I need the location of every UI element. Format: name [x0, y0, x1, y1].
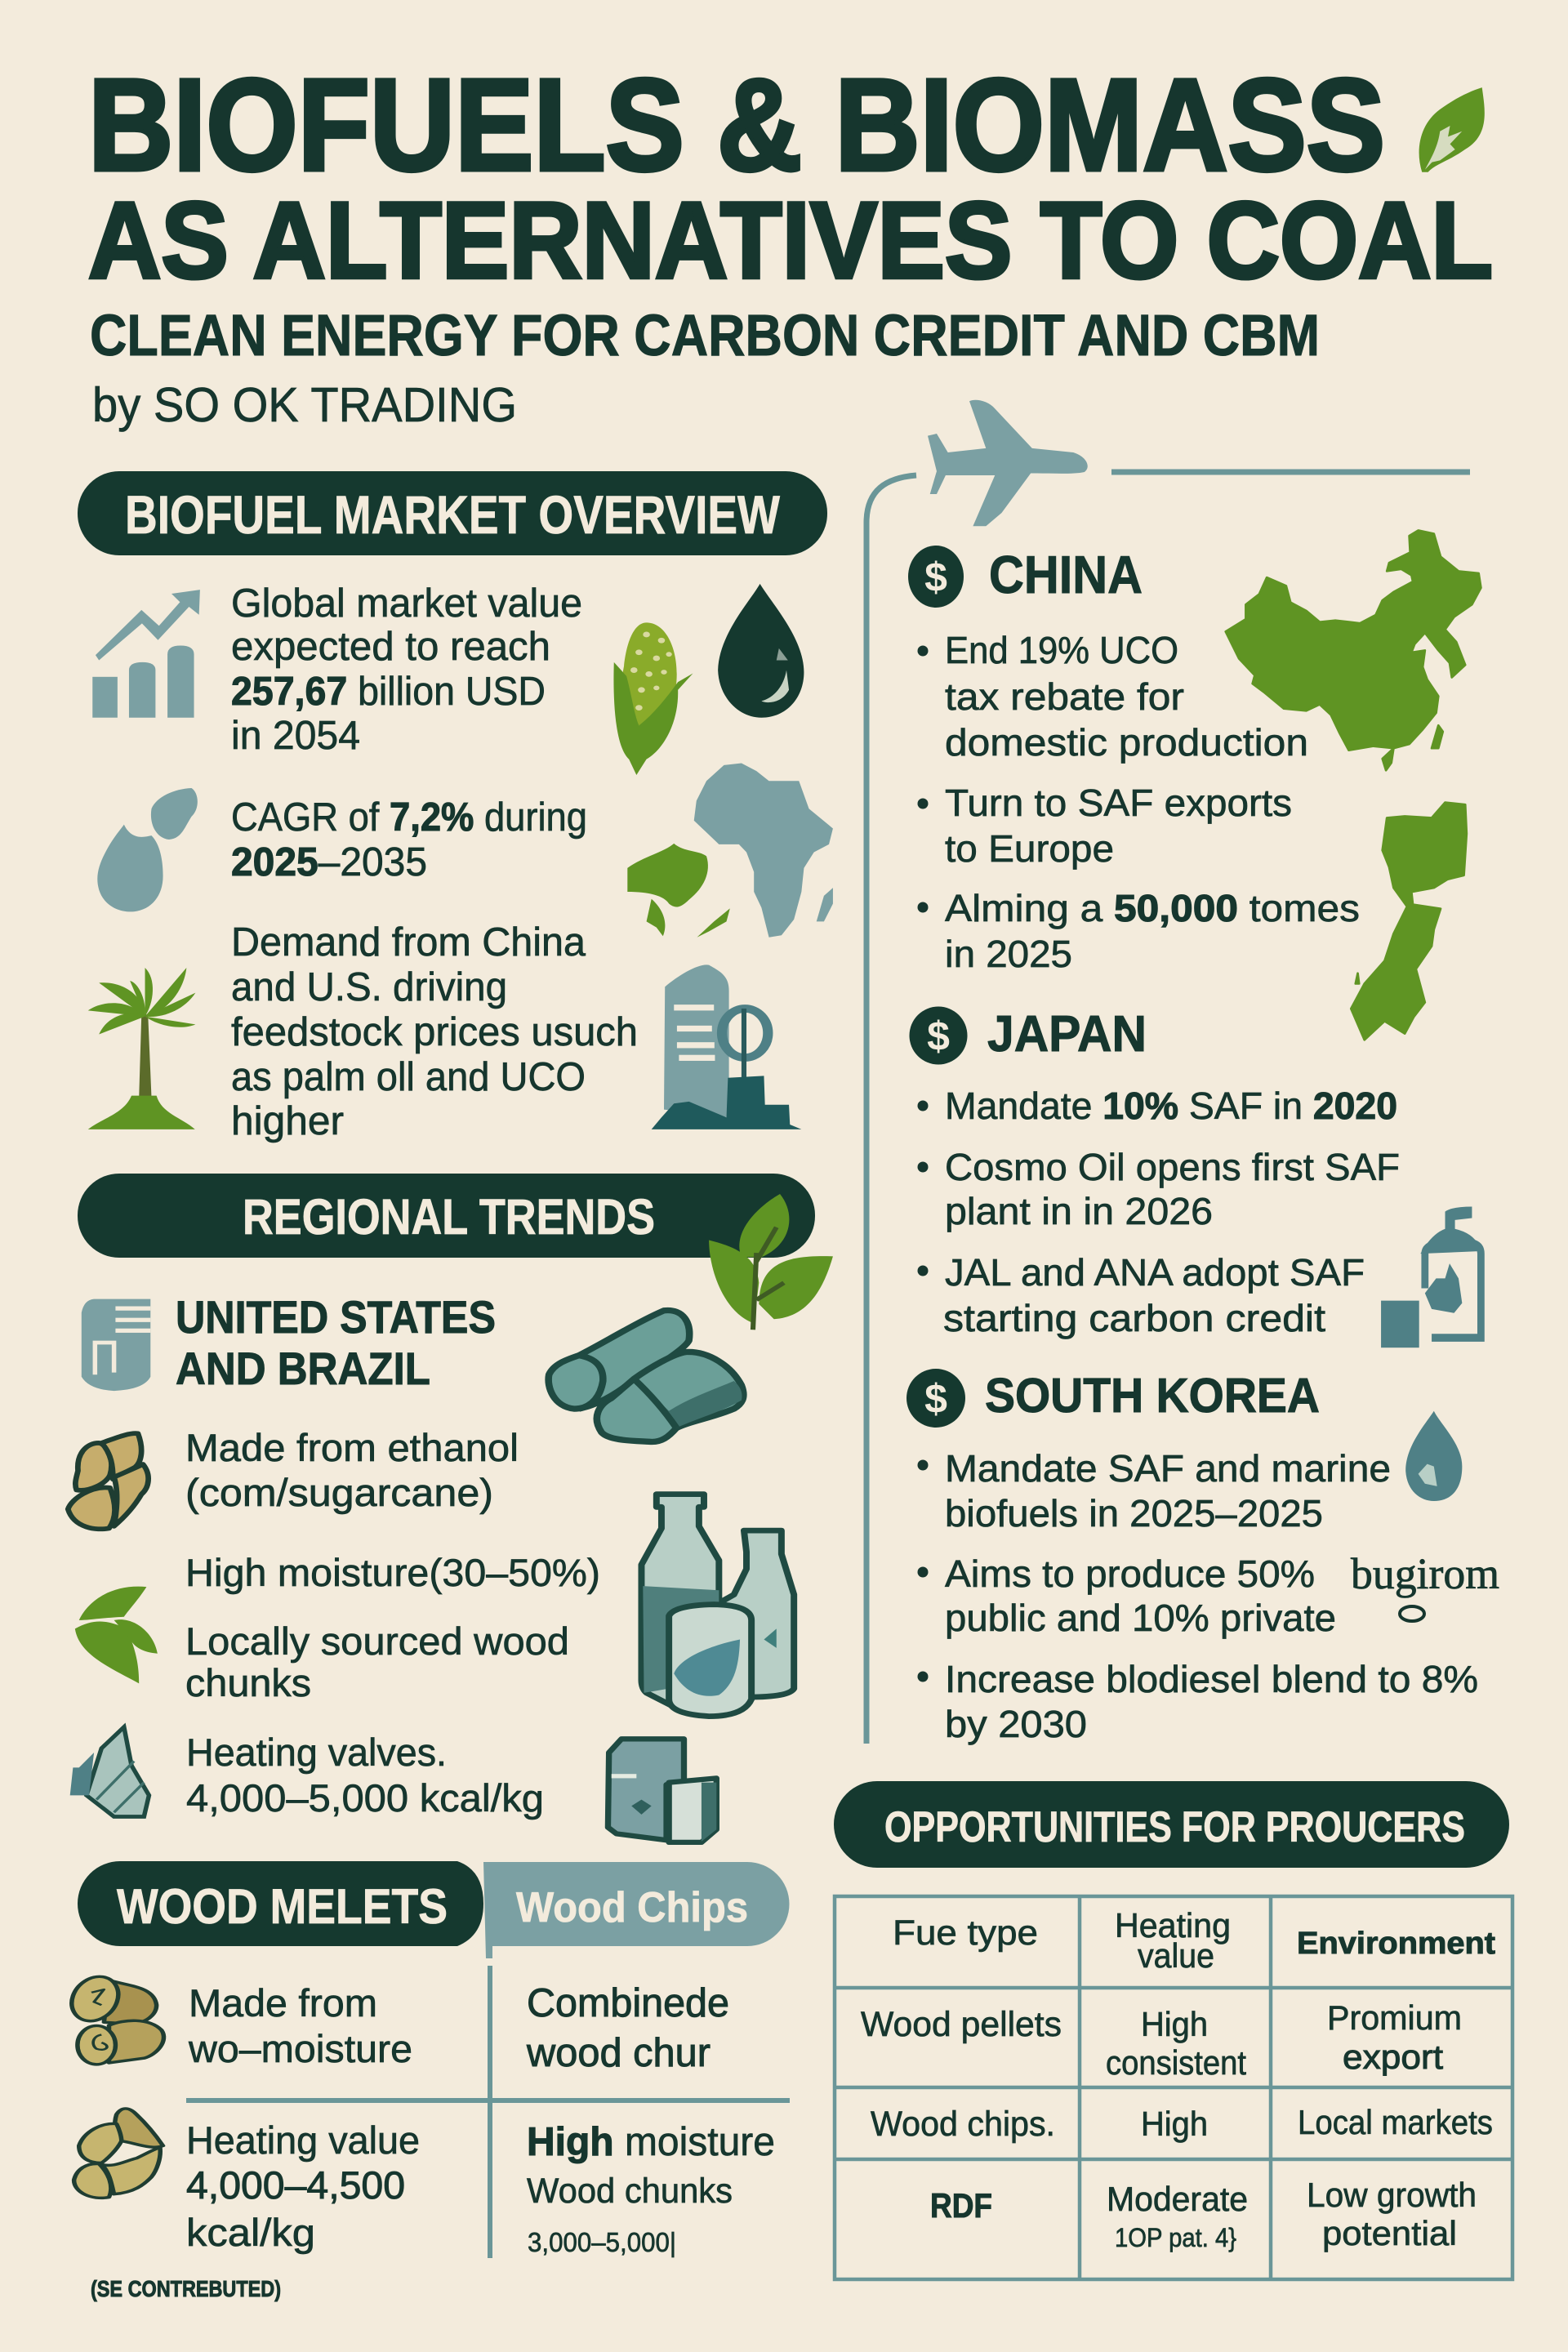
icon: dollar: $	[924, 555, 947, 600]
icon: dollar	[910, 1006, 967, 1065]
map: Japan	[1351, 803, 1467, 1040]
bullets: China: to Europe	[945, 827, 1114, 870]
heading: opportunities	[834, 1781, 1509, 1868]
icon: pump bottle	[1381, 1207, 1481, 1348]
row: wood chips	[871, 2103, 1493, 2144]
text: demand: as palm oll and UCO	[231, 1055, 586, 1099]
icon: palm tree	[88, 968, 195, 1129]
bullets: South Korea: Increase blodiesel blend to 8%	[945, 1658, 1478, 1700]
bullets: South Korea: public and 10% private	[945, 1597, 1336, 1639]
icon: green leaves	[709, 1194, 833, 1330]
icon: teal logs	[549, 1310, 743, 1442]
text: high moisture: High moisture	[527, 2120, 775, 2164]
text: combined wood: wood chur	[526, 2031, 710, 2075]
bullets: China: domestic production	[945, 721, 1308, 764]
footnote: (SE CONTREBUTED)	[91, 2276, 281, 2301]
bullets: South Korea: by 2030	[945, 1703, 1087, 1745]
bullets: South Korea: biofuels in 2025–2025	[945, 1492, 1323, 1535]
panel: asia policies	[866, 400, 1499, 1745]
text: high moisture: Wood chunks	[527, 2172, 733, 2211]
bullets: China: in 2025	[945, 933, 1072, 975]
text: high moisture	[527, 2120, 775, 2257]
section: Japan	[910, 803, 1481, 1348]
title	[88, 51, 1493, 301]
icon: wood logs	[65, 1974, 164, 2065]
icon: corn	[613, 622, 693, 775]
text: moisture and sourcing: High moisture(30–50%)	[185, 1551, 600, 1594]
icon: wood chip cone	[70, 1727, 149, 1816]
text: market value: in 2054	[231, 714, 360, 758]
text: CAGR: 2025–2035	[231, 840, 427, 884]
bullets: China: tax rebate for	[945, 675, 1184, 718]
icon: dollar	[906, 1369, 965, 1428]
panel: biofuel market overview	[78, 471, 833, 1143]
text: CAGR	[231, 795, 587, 884]
row: RDF: potential	[1322, 2214, 1457, 2252]
section: China	[908, 530, 1481, 975]
row: RDF: 1OP pat. 4}	[1115, 2223, 1236, 2252]
stray word: bugirom	[1351, 1549, 1499, 1598]
route line	[866, 472, 1470, 1744]
row: RDF: Low growth	[1307, 2176, 1477, 2214]
text: moisture and sourcing	[185, 1551, 600, 1704]
icon: dollar: $	[927, 1013, 950, 1059]
text: heating values: Heating valves.	[186, 1731, 447, 1774]
bullets: Japan: starting carbon credit	[943, 1297, 1325, 1339]
heading: China: CHINA	[989, 545, 1143, 604]
tab: wood melets: WOOD MELETS	[117, 1879, 448, 1934]
bullets: China	[918, 629, 1360, 975]
header row: value	[1138, 1936, 1214, 1975]
text: demand: Demand from China	[231, 920, 586, 964]
text: market value: Global market value	[231, 581, 582, 626]
row: wood chips: High	[1141, 2105, 1208, 2143]
text: combined wood: Combinede	[527, 1981, 729, 2025]
row: wood pellets: consistent	[1106, 2043, 1246, 2082]
bullets: South Korea	[918, 1447, 1478, 1745]
text: heating value: 4,000–4,500	[186, 2163, 405, 2207]
map: China	[1226, 530, 1481, 770]
icon: leaf	[75, 1587, 158, 1683]
text: market value: 257,67 billion USD	[231, 670, 546, 714]
text: demand: higher	[231, 1099, 344, 1143]
row: RDF	[930, 2176, 1477, 2252]
text: heating value	[186, 2118, 420, 2254]
text: market value: expected to reach	[231, 625, 550, 669]
bullets: China: Turn to SAF exports	[945, 782, 1292, 824]
text: heating values: 4,000–5,000 kcal/kg	[186, 1776, 544, 1820]
bullets: South Korea: Aims to produce 50%	[945, 1552, 1315, 1595]
text: made from ethanol: (com/sugarcane)	[185, 1471, 493, 1514]
header row: Heating	[1115, 1906, 1231, 1944]
heading: United States and Brazil: UNITED STATES	[176, 1291, 496, 1343]
heading: South Korea: SOUTH KOREA	[985, 1369, 1320, 1423]
row: RDF: RDF	[930, 2186, 992, 2225]
heading: regional trends: REGIONAL TRENDS	[243, 1189, 655, 1245]
icon: wood pieces	[74, 2109, 163, 2198]
text: CAGR: CAGR of 7,2% during	[231, 795, 587, 840]
bullets: China: End 19% UCO	[945, 629, 1178, 671]
title: BIOFUELS & BIOMASS	[88, 51, 1385, 198]
row: wood pellets: Wood pellets	[861, 2005, 1062, 2044]
bullets: Japan: Mandate 10% SAF in 2020	[945, 1085, 1397, 1127]
text: moisture and sourcing: chunks	[185, 1661, 311, 1704]
tab: wood chips	[483, 1862, 789, 1958]
text: demand: feedstock prices usuch	[231, 1010, 638, 1054]
panel: opportunities for producers	[834, 1781, 1512, 2279]
text: made from ethanol	[185, 1426, 519, 1514]
header row: Fue type	[893, 1913, 1038, 1953]
tab: wood chips: Wood Chips	[516, 1884, 748, 1931]
text: combined wood	[526, 1981, 729, 2075]
text: made from	[188, 1981, 412, 2070]
section: South Korea	[906, 1369, 1499, 1745]
text: market value	[231, 581, 582, 758]
panel: regional trends	[68, 1174, 833, 1842]
text: made from ethanol: Made from ethanol	[185, 1426, 519, 1469]
bullets: Japan: Cosmo Oil opens first SAF	[945, 1146, 1400, 1188]
bullets: China: Alming a 50,000 tomes	[945, 887, 1360, 929]
icon: growth chart	[92, 590, 200, 718]
icon: document	[82, 1299, 150, 1391]
icon: oil drop	[718, 584, 804, 718]
icon: bottles	[641, 1494, 794, 1717]
row: wood pellets: Promium	[1327, 1998, 1462, 2037]
heading: United States and Brazil: AND BRAZIL	[176, 1343, 430, 1394]
icon: water drop	[1405, 1411, 1462, 1501]
text: high moisture: 3,000–5,000|	[528, 2227, 676, 2257]
row: wood pellets	[861, 1998, 1462, 2082]
row: wood chips: Local markets	[1298, 2103, 1493, 2141]
bullets: Japan: plant in in 2026	[945, 1190, 1213, 1232]
heading: regional trends	[78, 1174, 815, 1258]
tab: wood melets	[78, 1861, 483, 1946]
text: heating value: Heating value	[186, 2118, 420, 2162]
heading: biofuel market overview: BIOFUEL MARKET OVERVIEW	[125, 484, 781, 545]
heading: biofuel market overview	[78, 471, 827, 555]
bullets: Japan: JAL and ANA adopt SAF	[945, 1251, 1365, 1294]
stray word	[1351, 1549, 1499, 1621]
icon: title leaf	[1419, 87, 1485, 172]
row: wood pellets: export	[1343, 2038, 1443, 2076]
icon: packaging	[608, 1739, 716, 1842]
icon: airplane	[928, 400, 1088, 526]
title: AS ALTERNATIVES TO COAL	[88, 180, 1493, 301]
row: RDF: Moderate	[1107, 2180, 1248, 2218]
text: heating values	[186, 1731, 544, 1820]
icon: teal blobs	[97, 788, 198, 911]
header row	[893, 1906, 1495, 1975]
row: wood pellets: High	[1141, 2005, 1208, 2043]
row: wood chips: Wood chips.	[871, 2105, 1055, 2144]
heading: Japan: JAPAN	[987, 1006, 1147, 1062]
text: made from: wo–moisture	[188, 2027, 412, 2070]
text: demand: and U.S. driving	[231, 965, 507, 1009]
icon: refinery building	[652, 964, 801, 1129]
table	[835, 1896, 1512, 2279]
header row: Environment	[1297, 1927, 1495, 1961]
icon: dollar: $	[924, 1376, 947, 1422]
icon: world map	[627, 763, 833, 938]
text: made from: Made from	[189, 1981, 377, 2025]
byline: by SO OK TRADING	[92, 378, 517, 432]
text: moisture and sourcing: Locally sourced wood	[185, 1619, 569, 1663]
bullets: South Korea: Mandate SAF and marine	[945, 1447, 1391, 1490]
subtitle: CLEAN ENERGY FOR CARBON CREDIT AND CBM	[90, 304, 1320, 368]
icon: wood pieces	[68, 1433, 149, 1529]
panel: wood pellets and wood chips	[65, 1861, 790, 2301]
icon: dollar	[908, 546, 964, 608]
text: demand	[231, 920, 638, 1143]
heading: United States and Brazil	[176, 1291, 496, 1394]
text: heating value: kcal/kg	[186, 2211, 315, 2254]
bullets: Japan	[918, 1085, 1400, 1339]
